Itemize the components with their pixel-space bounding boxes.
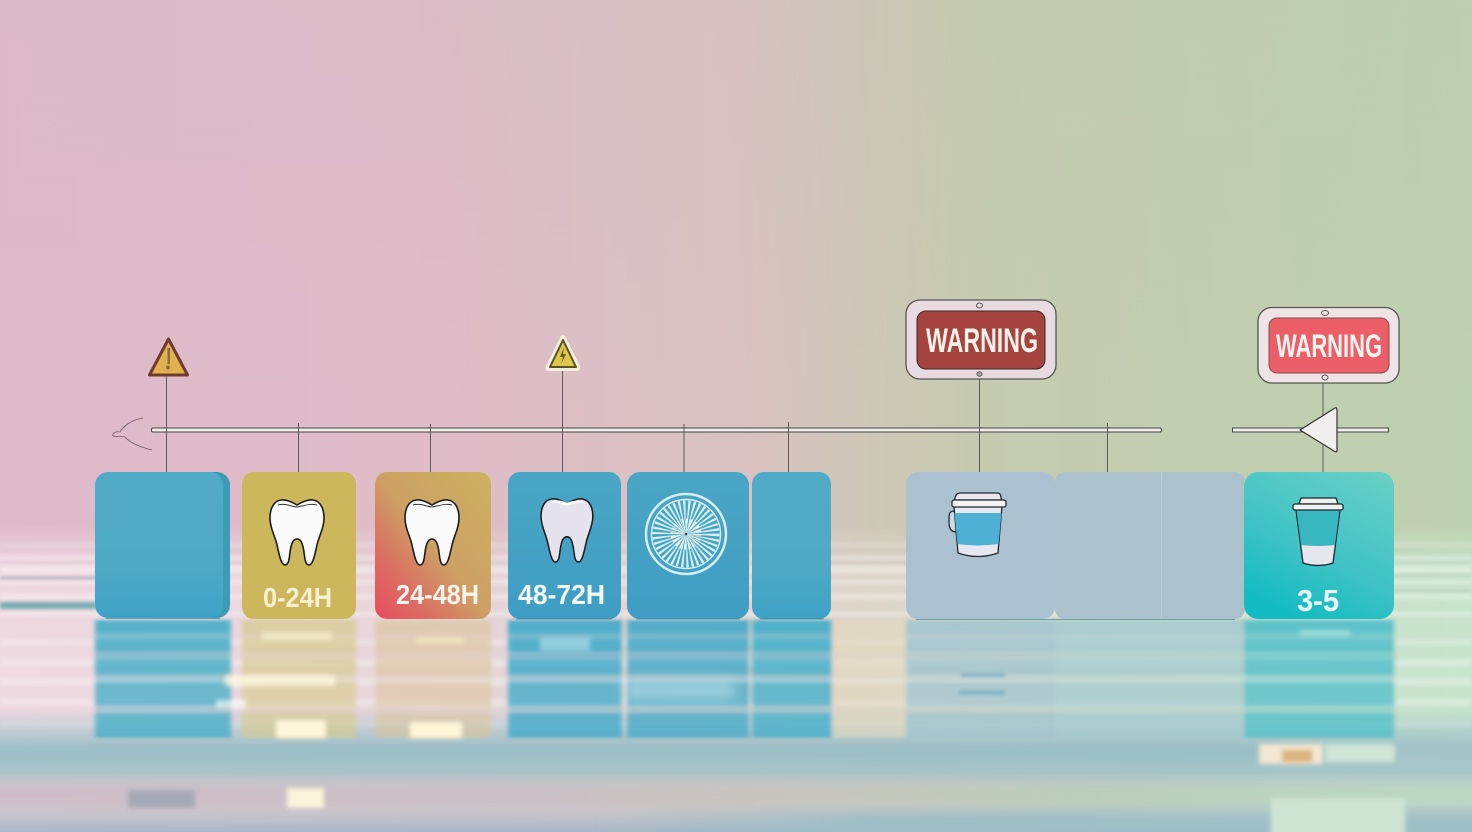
icon: high voltage triangle — [545, 335, 580, 371]
left teal water band — [0, 602, 96, 609]
card 5: wheel — [627, 472, 749, 619]
label: 3-5: 3-5 — [1297, 583, 1339, 618]
card 7: pale blue with cup — [906, 472, 1055, 619]
main timeline axis — [152, 428, 1162, 432]
card 2: 0-24H — [242, 472, 356, 619]
reflection highlights — [128, 630, 1405, 832]
icon: tooth — [270, 500, 324, 565]
card 4: 48-72H — [508, 472, 621, 619]
card 1: blank blue — [95, 472, 230, 618]
timeline start mark — [113, 418, 152, 450]
card 9: 3-5 — [1244, 472, 1394, 619]
connector stems — [166, 368, 1323, 472]
icon: tooth — [405, 500, 459, 565]
card 6: blank blue — [752, 472, 831, 619]
icon: coffee cup — [1293, 498, 1343, 566]
left water line — [0, 577, 96, 579]
sign: warning dark red: WARNING — [926, 322, 1038, 360]
label: 48-72H: 48-72H — [518, 579, 605, 610]
timeline arrowhead — [1300, 408, 1337, 452]
icon: tooth — [541, 499, 593, 562]
label: 24-48H: 24-48H — [396, 579, 479, 610]
label: 0-24H: 0-24H — [263, 582, 332, 613]
water floor — [0, 520, 1472, 832]
icon: coffee cup with sleeve — [949, 493, 1006, 556]
icon: warning triangle — [150, 339, 188, 375]
secondary timeline axis — [1232, 428, 1388, 432]
icon: wheel — [646, 494, 726, 574]
sign: warning bright red — [1258, 308, 1399, 383]
card 3: 24-48H — [375, 472, 491, 619]
card reflections — [95, 619, 1394, 741]
sign: warning dark red — [906, 300, 1056, 379]
sign: warning bright red: WARNING — [1276, 328, 1382, 364]
card 8: wide pale blue — [1055, 472, 1245, 619]
card base shadow lines — [106, 618, 1235, 620]
